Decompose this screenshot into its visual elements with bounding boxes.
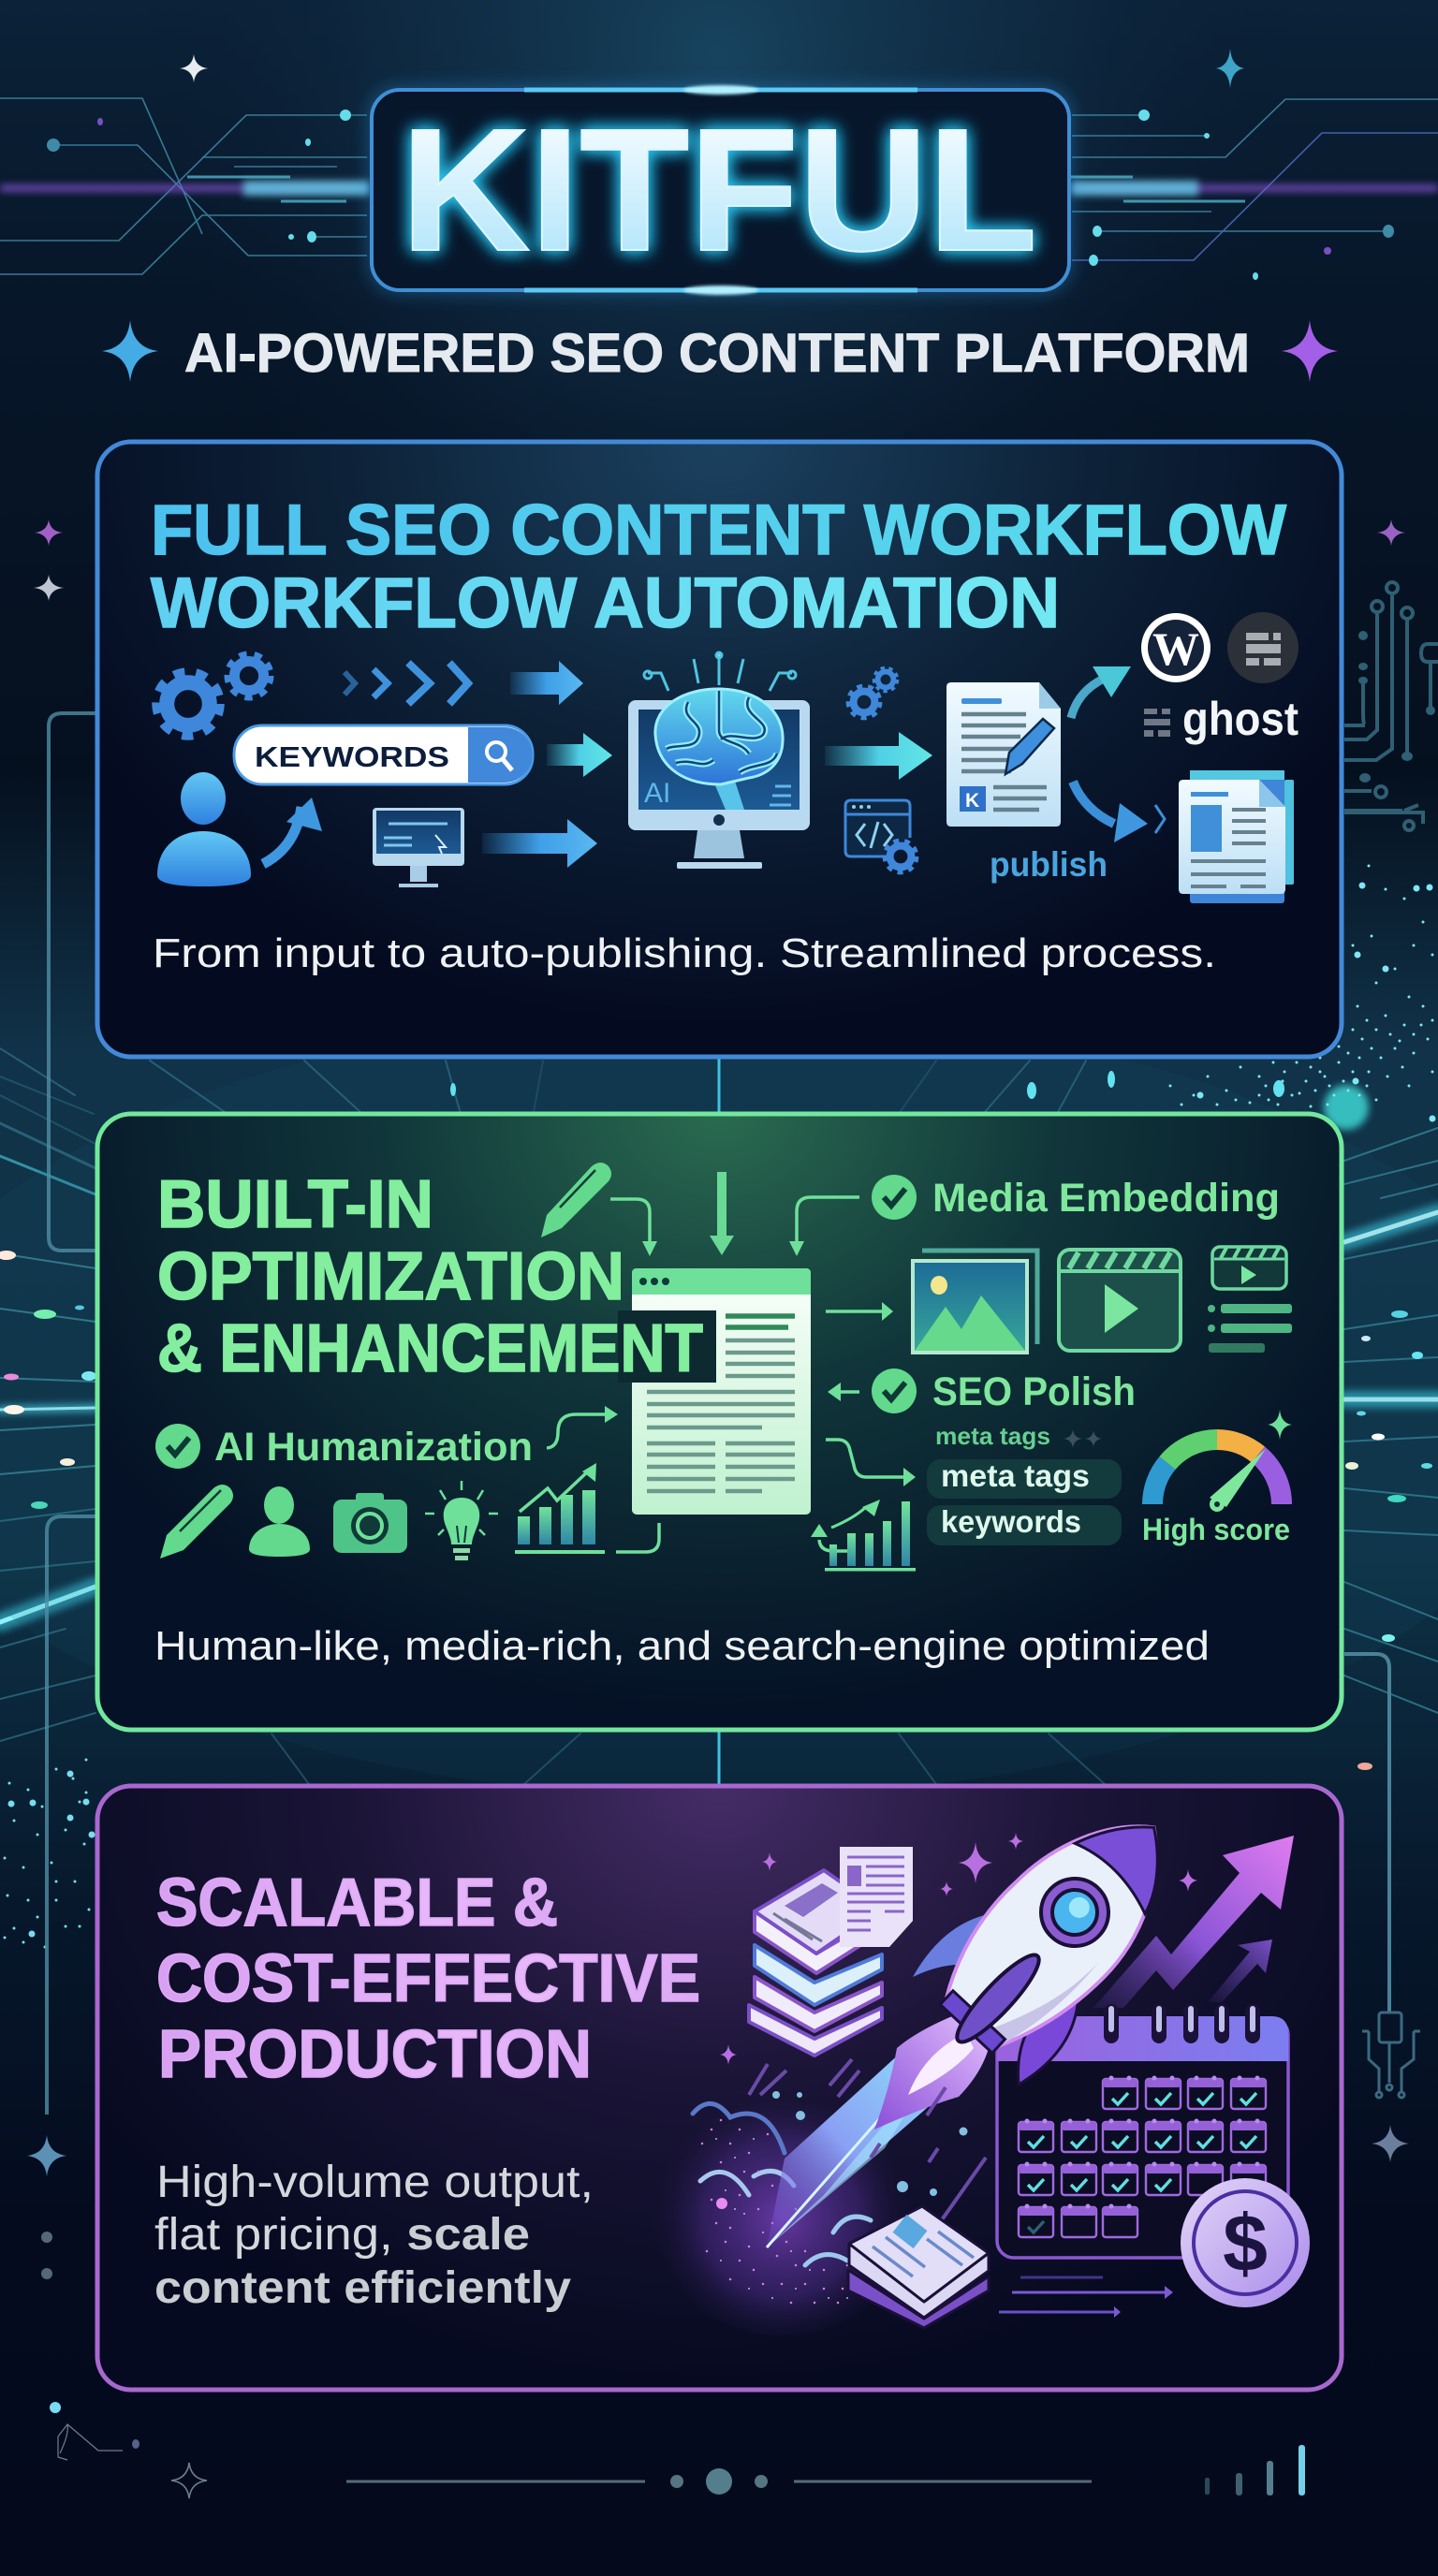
calendar cells — [1019, 2076, 1266, 2237]
icon: rising bars — [825, 1500, 916, 1571]
icon: code window — [845, 800, 917, 872]
panel: built-in optimization — [97, 1114, 1342, 1730]
caption: optimization: Human-like, media-rich, and search-engine optimized — [154, 1623, 1210, 1669]
icon: small monitor — [373, 808, 464, 887]
icon: dollar coin — [1181, 2178, 1310, 2307]
heading: optimization: OPTIMIZATION — [157, 1239, 624, 1314]
logo: WordPress: W — [1152, 622, 1199, 675]
tag: keywords pill — [927, 1504, 1122, 1545]
background light streaks: sides and gaps — [0, 1011, 1438, 1797]
sparkles — [720, 1833, 1197, 2065]
icon: small clapper — [1212, 1247, 1286, 1289]
heading: workflow: WORKFLOW AUTOMATION — [151, 564, 1060, 643]
label: high score: High score — [1142, 1513, 1290, 1546]
circuit traces: top right — [1344, 582, 1438, 830]
icon: book bottom — [848, 2206, 989, 2328]
subtitle: AI-POWERED SEO CONTENT PLATFORM — [184, 323, 1250, 384]
arrows: publish outputs — [1071, 666, 1165, 842]
icon: growth arrows — [1093, 1836, 1294, 2008]
tag: keywords pill: keywords — [941, 1504, 1081, 1539]
tag: meta small — [935, 1422, 1102, 1450]
icon: document with pencil: K — [965, 790, 979, 812]
icon: media list — [1208, 1304, 1292, 1353]
icon: growth bars — [515, 1463, 605, 1554]
label: SEO polish: SEO Polish — [932, 1369, 1136, 1414]
arrows into page — [547, 1172, 916, 1552]
label: media embedding: Media Embedding — [932, 1176, 1280, 1221]
small arrows — [999, 2277, 1173, 2318]
caption: scalable — [154, 2158, 594, 2313]
icon: AI monitor with brain — [628, 652, 810, 869]
heading: workflow: FULL SEO CONTENT WORKFLOW — [151, 490, 1286, 570]
heading: scalable — [156, 1866, 700, 2092]
heading: optimization: BUILT-IN — [157, 1167, 433, 1242]
heading: optimization: & ENHANCEMENT — [157, 1311, 703, 1386]
label: AI humanization: AI Humanization — [214, 1425, 533, 1470]
icon: AI monitor with brain: AI — [644, 778, 670, 809]
caption: scalable: content efficiently — [154, 2263, 571, 2313]
arrows into AI — [482, 661, 612, 868]
icon: clapper video — [1059, 1250, 1181, 1351]
panel: full SEO content workflow — [97, 442, 1342, 1057]
icon: article page — [840, 1847, 913, 1947]
bracket connector lines — [47, 713, 95, 2115]
icon: stacked books — [749, 1870, 882, 2056]
icon: small gears — [848, 668, 897, 718]
logo: WordPress — [1141, 613, 1211, 682]
logo: ghost badge — [1227, 612, 1299, 683]
icon: rocket — [913, 1783, 1202, 2085]
keyword search bar: KEYWORDS — [255, 740, 449, 773]
heading: optimization — [157, 1167, 703, 1386]
heading: scalable: PRODUCTION — [158, 2017, 592, 2092]
nebula and smoke — [651, 2091, 968, 2335]
panel connectors — [717, 1059, 721, 1784]
particle fields — [5, 866, 1432, 1947]
heading: scalable: COST-EFFECTIVE — [156, 1941, 700, 2016]
arrow: AI to document — [825, 732, 932, 780]
icon: page window — [618, 1268, 811, 1515]
icon: pen top — [541, 1163, 611, 1237]
icon: published pages — [1179, 770, 1294, 903]
logo: ghost wordmark: ghost — [1182, 693, 1299, 745]
panel: scalable production — [97, 1783, 1342, 2390]
icon row: humanization — [160, 1481, 498, 1560]
header circuit lines — [0, 98, 1438, 280]
tag: meta small: meta tags — [935, 1422, 1050, 1450]
icon: score gauge — [1152, 1410, 1292, 1512]
chip icon: right side connector — [1344, 1654, 1420, 2098]
heading: scalable: SCALABLE & — [156, 1866, 558, 1940]
icon: image — [913, 1251, 1037, 1353]
tag: meta tags pill: meta tags — [941, 1458, 1090, 1493]
caption: scalable: High-volume output, — [156, 2158, 594, 2207]
heading: workflow — [151, 490, 1286, 643]
caption: workflow: From input to auto-publishing. Streamlined process. — [153, 930, 1216, 976]
title text: KITFUL — [401, 94, 1037, 287]
footer decoration — [58, 2424, 1305, 2498]
icon: chevrons — [345, 663, 468, 704]
icon: user — [157, 772, 251, 886]
title plaque — [370, 85, 1071, 295]
keyword search bar — [234, 725, 533, 784]
icon: calendar — [997, 2004, 1288, 2258]
curved arrow from user — [263, 798, 322, 864]
tag: meta tags pill — [927, 1458, 1122, 1499]
label: publish: publish — [990, 845, 1108, 884]
rocket exhaust — [749, 2008, 992, 2247]
icon: gears — [157, 654, 271, 735]
icon: document with pencil — [946, 682, 1061, 827]
caption: scalable: flat pricing, scale — [154, 2210, 530, 2260]
icon: dollar coin: $ — [1223, 2199, 1268, 2289]
